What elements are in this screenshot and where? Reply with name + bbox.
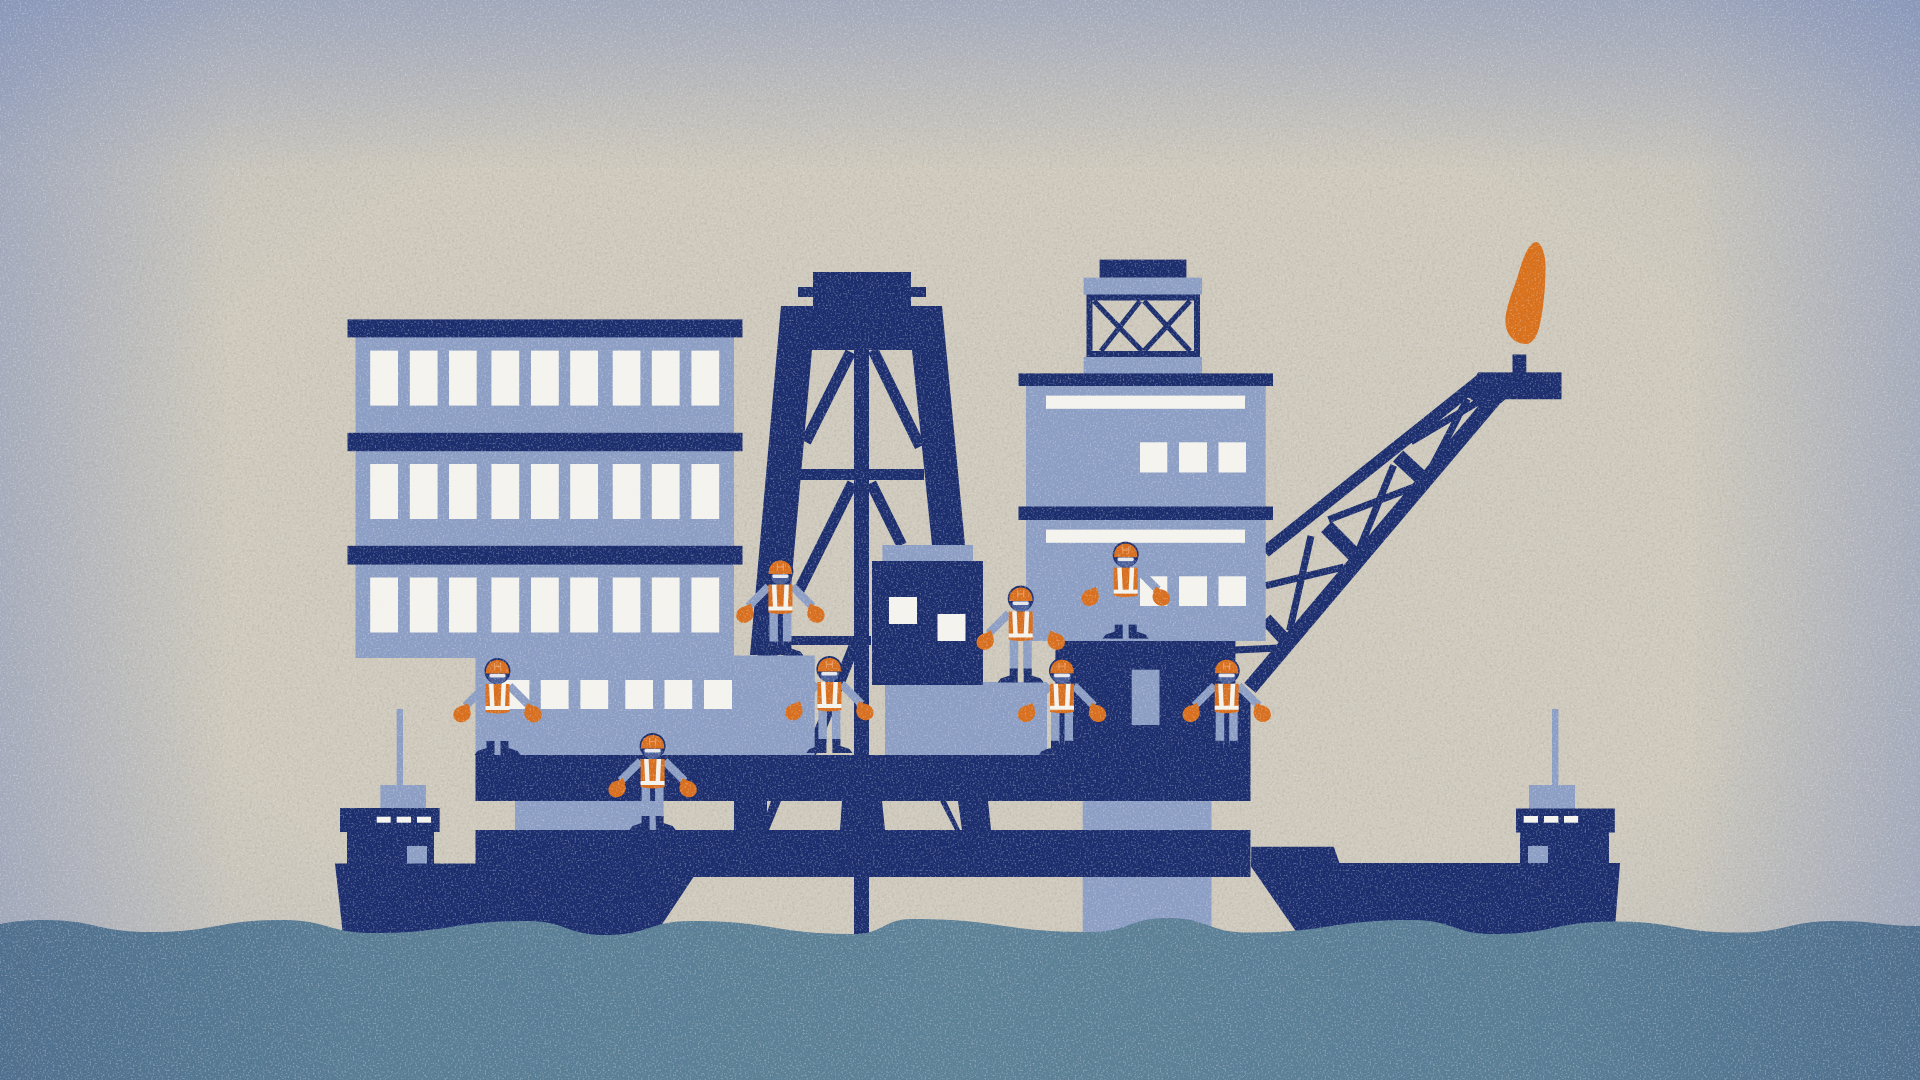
control tower: [1018, 260, 1273, 755]
base block with door: [1055, 641, 1250, 755]
accommodation block: left building: [348, 319, 815, 756]
right ship: [1251, 709, 1620, 940]
central module: [872, 545, 1047, 755]
lower annex: [476, 656, 815, 756]
support legs and column: [515, 801, 1212, 941]
offshore platform: [335, 242, 1620, 941]
worker on control tower: [1078, 542, 1173, 639]
windows: middle row: [370, 464, 719, 519]
worker on derrick: [733, 558, 828, 656]
derrick tower: [750, 272, 965, 940]
lattice box: [1090, 298, 1197, 354]
flare flame: [1506, 242, 1546, 344]
upper deck: [476, 755, 1250, 801]
left ship: [335, 709, 1250, 935]
hull and lower pontoon: [335, 830, 1250, 935]
worker lower deck: [605, 733, 700, 830]
worker by derrick base: [782, 656, 877, 753]
windows: bottom row: [370, 578, 719, 632]
sea: [0, 918, 1920, 1080]
windows: annex row: [502, 680, 732, 709]
crane boom: [1235, 378, 1500, 688]
worker left annex: [450, 658, 545, 755]
worker by tower base left: [1015, 658, 1109, 755]
roof and floor bars: [348, 319, 742, 565]
windows: top row: [370, 351, 719, 406]
worker on central module: [973, 586, 1068, 682]
windows: [1046, 396, 1246, 606]
worker by crane base: [1179, 658, 1274, 755]
ship mast and funnel: [397, 709, 403, 785]
crane head and flare stack: [1466, 354, 1562, 412]
